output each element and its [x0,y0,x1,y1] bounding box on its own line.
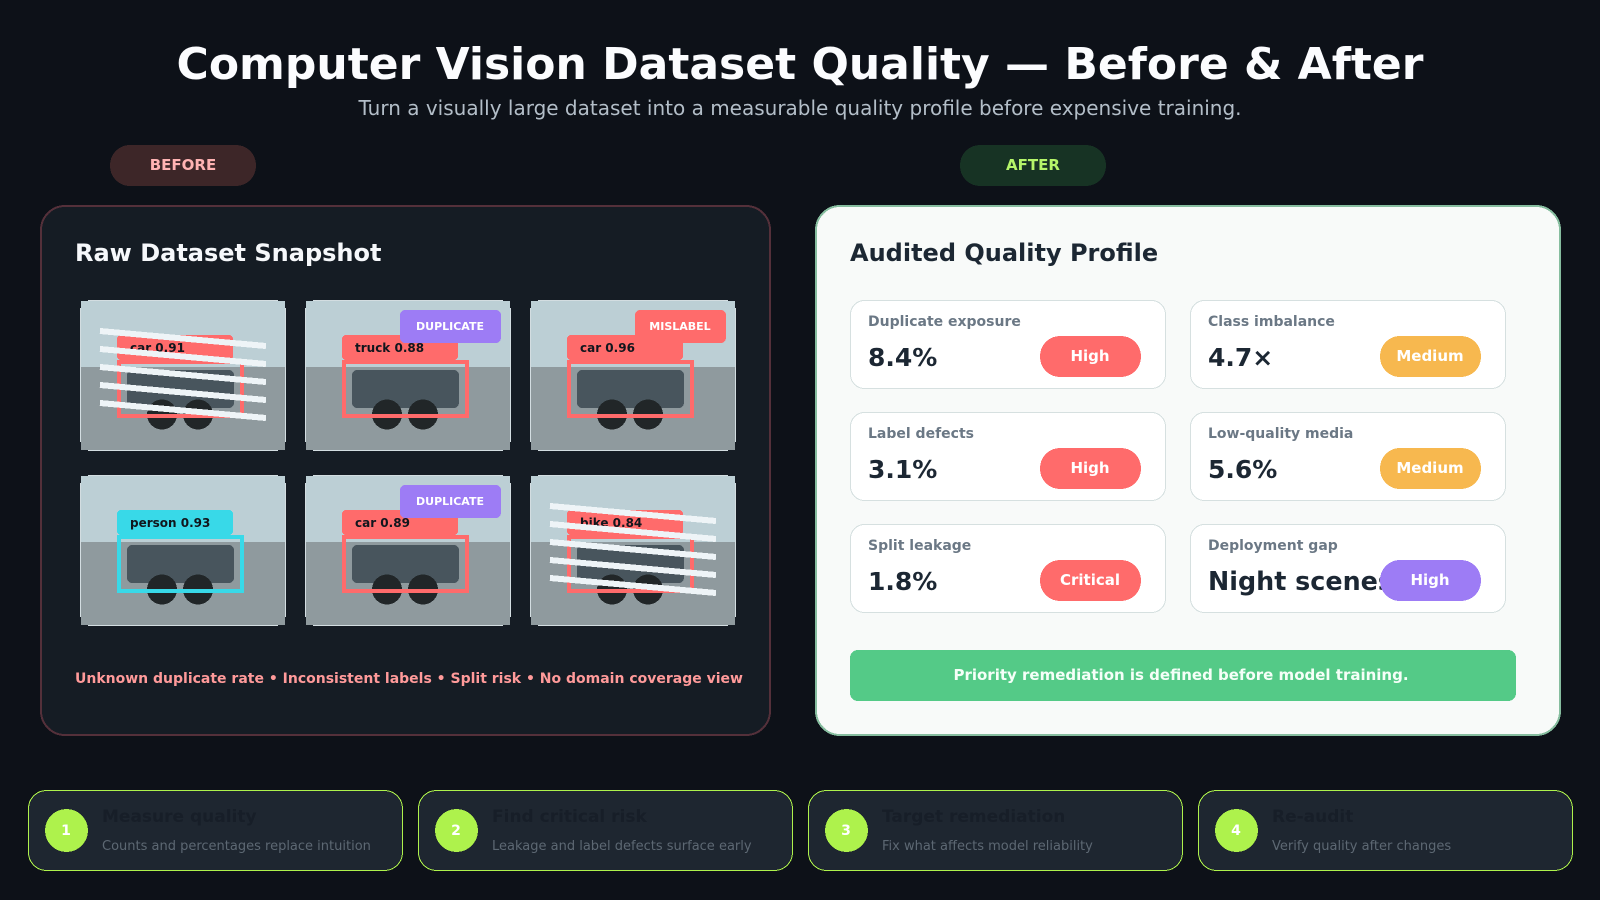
image tile 4: person: person 0.93 [130,516,210,530]
step 3: target remediation: 3 [841,823,851,839]
metric: duplicate exposure: High [1070,347,1110,365]
metric: label defects: Label defects [868,426,974,442]
metric: class imbalance: Medium [1396,347,1464,365]
metric: duplicate exposure: Duplicate exposure [868,314,1021,330]
metric: split leakage: Split leakage [868,538,971,554]
metric: low-quality media: Medium [1396,459,1464,477]
step 1: measure quality: 1 [61,823,71,839]
step 4: re-audit [1198,790,1572,870]
metric: label defects: 3.1% [868,455,937,484]
metric: duplicate exposure: 8.4% [868,343,937,372]
metric: label defects [850,412,1166,500]
metric: deployment gap: Deployment gap [1208,538,1338,554]
metric: split leakage [850,524,1166,612]
step 1: measure quality [28,790,402,870]
before pill: BEFORE [150,156,216,174]
subtitle: Turn a visually large dataset into a measurable quality profile before expensive training. [357,96,1242,120]
image tile 1: noisy car: car 0.91 [130,341,185,355]
step 2: find critical risk: 2 [451,823,461,839]
metric: split leakage: Critical [1060,571,1120,589]
image tile 2: duplicate truck: DUPLICATE [416,320,484,333]
after pill: AFTER [1006,156,1060,174]
title: Computer Vision Dataset Quality — Before & After [177,39,1424,90]
metric: split leakage: 1.8% [868,567,937,596]
step 3: target remediation: Fix what affects model reliability [882,839,1093,854]
metric: deployment gap: High [1410,571,1450,589]
image tile 2: duplicate truck [306,300,510,450]
metric: low-quality media [1190,412,1506,500]
image tile 1: noisy car [80,300,286,450]
image tile 5: duplicate car [306,476,510,626]
step 4: re-audit: Re-audit [1272,807,1353,827]
panel: audited quality profile [816,206,1560,735]
step 1: measure quality: Counts and percentages replace intuition [102,839,371,854]
step 4: re-audit: 4 [1231,823,1241,839]
panel: raw dataset snapshot [41,206,770,735]
image tile 5: duplicate car: car 0.89 [355,516,410,530]
metric: deployment gap: Night scenes [1208,566,1393,596]
metric: class imbalance: 4.7× [1208,343,1273,372]
step 3: target remediation [808,790,1182,870]
metric: low-quality media: Low-quality media [1208,426,1353,442]
metric: class imbalance: Class imbalance [1208,314,1335,330]
step 3: target remediation: Target remediation [882,807,1065,827]
metric: duplicate exposure [850,300,1166,388]
image tile 6: noisy bike: bike 0.84 [580,516,642,530]
after pill [960,145,1106,186]
image tile 3: mislabel car [530,300,736,450]
remediation banner [850,650,1516,701]
metric: class imbalance [1190,300,1506,388]
metric: deployment gap [1190,524,1506,612]
step 2: find critical risk: Find critical risk [492,807,647,827]
metric: low-quality media: 5.6% [1208,455,1277,484]
image tile 5: duplicate car: DUPLICATE [416,495,484,508]
problems summary: Unknown duplicate rate • Inconsistent labels • Split risk • No domain coverage view [75,671,743,687]
image tile 3: mislabel car: MISLABEL [649,320,711,333]
image tile 3: mislabel car: car 0.96 [580,341,635,355]
image tile 4: person [80,476,286,626]
step 2: find critical risk [418,790,792,870]
step 4: re-audit: Verify quality after changes [1272,839,1451,854]
step 2: find critical risk: Leakage and label defects surface early [492,839,752,854]
image tile 6: noisy bike [530,476,736,626]
panel heading: audited: Audited Quality Profile [850,239,1158,267]
panel heading: raw dataset: Raw Dataset Snapshot [75,239,381,267]
remediation banner: Priority remediation is defined before model training. [953,666,1409,684]
step 1: measure quality: Measure quality [102,807,257,827]
metric: label defects: High [1070,459,1110,477]
image tile 2: duplicate truck: truck 0.88 [355,341,424,355]
before pill [110,145,256,186]
